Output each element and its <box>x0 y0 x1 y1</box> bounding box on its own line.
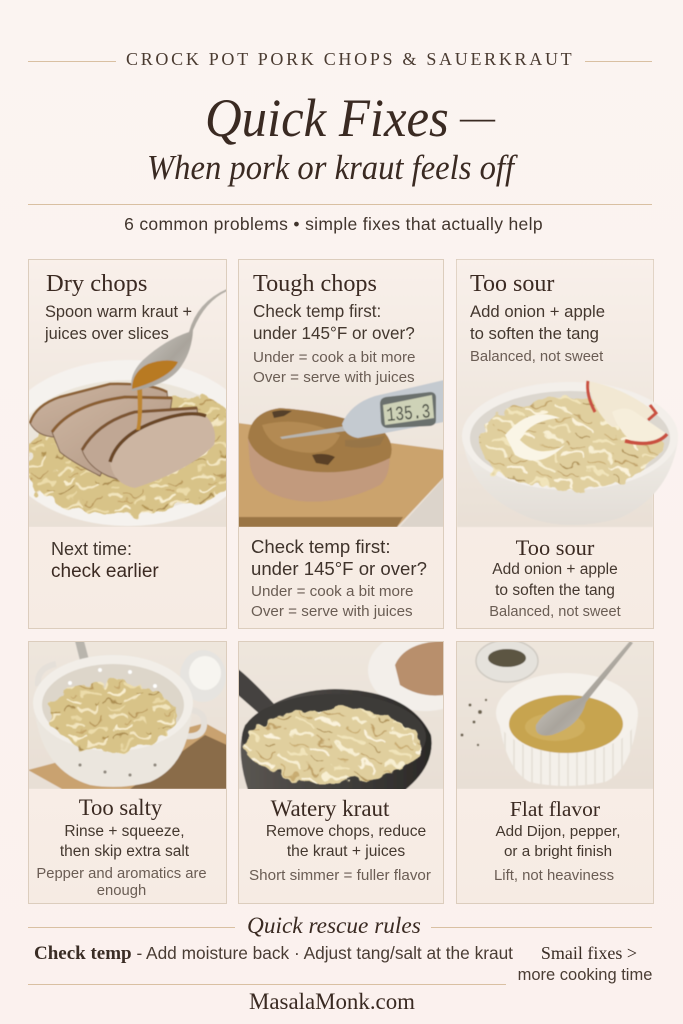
text: too sour fix: to soften the tang <box>470 324 599 343</box>
text: lower check: Check temp first: <box>251 536 390 557</box>
panel: too sour <box>456 259 654 629</box>
text: lower guidance <box>251 583 414 620</box>
subtitle: When pork or kraut feels off <box>147 149 514 187</box>
text: watery kraut fix: Remove chops, reduce <box>266 823 426 840</box>
panel: tough chops <box>238 259 444 629</box>
text: next time note: check earlier <box>51 561 159 582</box>
header: eyebrow title: CROCK POT PORK CHOPS & SAUERKRAUT <box>126 49 574 69</box>
illustration: skillet of kraut <box>239 642 443 789</box>
illustration: pork chop with thermometer: 135.3 <box>386 401 431 428</box>
text: rescue rules: Check temp - Add moisture back · Adjust tang/salt at the kraut <box>34 943 513 964</box>
illustration: ramekin of mustard with spoon <box>457 642 653 789</box>
text: tough chops check: Check temp first: <box>253 302 381 321</box>
text: watery kraut fix: the kraut + juices <box>287 843 405 860</box>
text: flat flavor fix <box>496 823 620 860</box>
illustration: colander of kraut <box>29 642 226 789</box>
heading: too sour: Too sour <box>470 271 554 297</box>
text: tough chops guidance: Over = serve with juices <box>253 369 415 386</box>
section heading: quick rescue rules: Quick rescue rules <box>247 913 421 939</box>
text: lower too sour fix: to soften the tang <box>495 582 615 598</box>
text: too salty fix <box>60 823 189 860</box>
text: small fixes note: more cooking time <box>518 966 652 984</box>
text: too sour fix: Add onion + apple <box>470 302 605 321</box>
heading: tough chops: Tough chops <box>253 270 377 297</box>
title dash: — <box>460 98 495 137</box>
main title: Quick Fixes <box>205 88 449 148</box>
text: too sour fix <box>470 302 605 343</box>
text: lower too sour fix: Add onion + apple <box>492 561 618 578</box>
text: flat flavor note: Lift, not heaviness <box>494 868 614 884</box>
heading: flat flavor: Flat flavor <box>510 797 600 821</box>
heading: lower too sour: Too sour <box>516 535 594 560</box>
panel: flat flavor <box>456 641 654 904</box>
text: watery kraut note: Short simmer = fuller flavor <box>249 867 431 884</box>
footer: website: MasalaMonk.com <box>249 989 415 1014</box>
illustration: bowl of kraut with apple <box>456 260 676 527</box>
text: too sour note: Balanced, not sweet <box>470 349 603 365</box>
heading: too salty: Too salty <box>79 795 162 820</box>
panel: dry chops <box>28 259 227 629</box>
text: lower guidance: Under = cook a bit more <box>251 583 414 600</box>
text: dry chops fix: Spoon warm kraut + <box>45 303 192 321</box>
text: tough chops check: under 145°F or over? <box>253 324 415 343</box>
panel: watery kraut <box>238 641 444 904</box>
text: small fixes note: Smail fixes > <box>541 943 637 963</box>
illustration: pork chop with thermometer <box>239 379 443 527</box>
text: tough chops guidance: Under = cook a bit more <box>253 349 416 366</box>
text: dry chops fix <box>44 303 192 343</box>
text: flat flavor fix: Add Dijon, pepper, <box>496 823 620 840</box>
text: next time note <box>51 539 159 582</box>
text: lower check <box>251 536 427 578</box>
tagline: 6 common problems • simple fixes that actually help <box>124 214 543 234</box>
text: too salty note <box>36 866 207 899</box>
heading: watery kraut: Watery kraut <box>271 796 389 821</box>
text: lower guidance: Over = serve with juices <box>251 603 413 620</box>
text: tough chops guidance <box>253 349 416 386</box>
text: too salty note: enough <box>97 883 146 899</box>
illustration: pork slices with spoon <box>29 289 226 527</box>
text: too salty fix: then skip extra salt <box>60 843 189 860</box>
text: too salty note: Pepper and aromatics are <box>36 866 207 882</box>
text: dry chops fix: juices over slices <box>45 325 169 343</box>
text: flat flavor fix: or a bright finish <box>504 843 612 860</box>
text: lower check: under 145°F or over? <box>251 558 427 578</box>
text: watery kraut fix <box>266 823 426 860</box>
panel: too salty <box>28 641 227 904</box>
heading: dry chops: Dry chops <box>46 270 147 297</box>
text: lower too sour note: Balanced, not sweet <box>489 604 621 620</box>
text: lower too sour fix <box>492 561 618 598</box>
text: small fixes note <box>518 943 652 984</box>
text: next time note: Next time: <box>51 539 132 559</box>
text: tough chops check <box>253 302 415 343</box>
text: too salty fix: Rinse + squeeze, <box>64 823 185 840</box>
